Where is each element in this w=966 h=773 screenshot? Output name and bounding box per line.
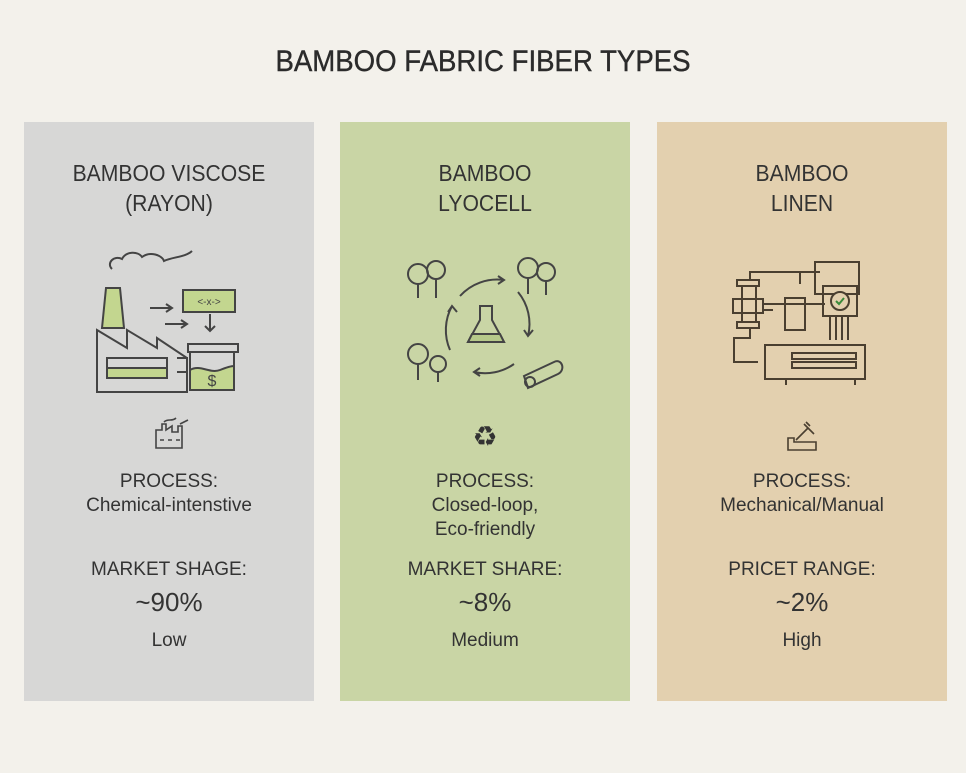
icon: recycle: ♻ <box>472 421 498 452</box>
text: process <box>720 471 884 516</box>
text: process <box>432 471 538 540</box>
text: process: Mechanical/Manual <box>720 495 884 516</box>
heading: viscose: (RAYON) <box>125 190 213 216</box>
title: BAMBOO FABRIC FIBER TYPES <box>275 45 691 78</box>
value: 8%: ~8% <box>459 587 511 617</box>
text: price range: PRICET RANGE: <box>728 559 876 580</box>
heading: viscose <box>73 160 265 216</box>
panel: linen <box>657 122 947 701</box>
heading: lyocell: LYOCELL <box>438 190 532 216</box>
text: process: Closed-loop, <box>432 495 538 516</box>
text: market share: MARKET SHARE: <box>408 559 562 580</box>
text: process: PROCESS: <box>436 471 534 492</box>
icon: factory: $ <box>208 373 217 390</box>
value: 2%: ~2% <box>776 587 828 617</box>
text: process <box>86 471 252 516</box>
icon: machine <box>732 261 866 385</box>
icon: factory <box>96 250 239 393</box>
heading: lyocell <box>438 160 532 216</box>
heading: linen <box>756 160 848 216</box>
heading: lyocell: BAMBOO <box>439 160 531 186</box>
text: process: PROCESS: <box>120 471 218 492</box>
text: market share: MARKET SHAGE: <box>91 559 247 580</box>
text: price: Low <box>152 630 186 651</box>
heading: linen: BAMBOO <box>756 160 848 186</box>
value: 90%: ~90% <box>135 587 203 617</box>
text: process: Eco-friendly <box>435 519 535 540</box>
icon: factory: <-x-> <box>197 297 221 308</box>
panel: lyocell <box>340 122 630 701</box>
text: process: Chemical-intenstive <box>86 495 252 516</box>
text: price: High <box>782 630 822 651</box>
icon: small tool <box>787 421 817 451</box>
text: price: Medium <box>451 630 519 651</box>
icon: closed loop <box>407 257 564 390</box>
panel: viscose <box>24 122 314 701</box>
heading: viscose: BAMBOO VISCOSE <box>73 160 265 186</box>
text: process: PROCESS: <box>753 471 851 492</box>
heading: linen: LINEN <box>771 190 833 216</box>
icon: small factory <box>155 417 188 449</box>
